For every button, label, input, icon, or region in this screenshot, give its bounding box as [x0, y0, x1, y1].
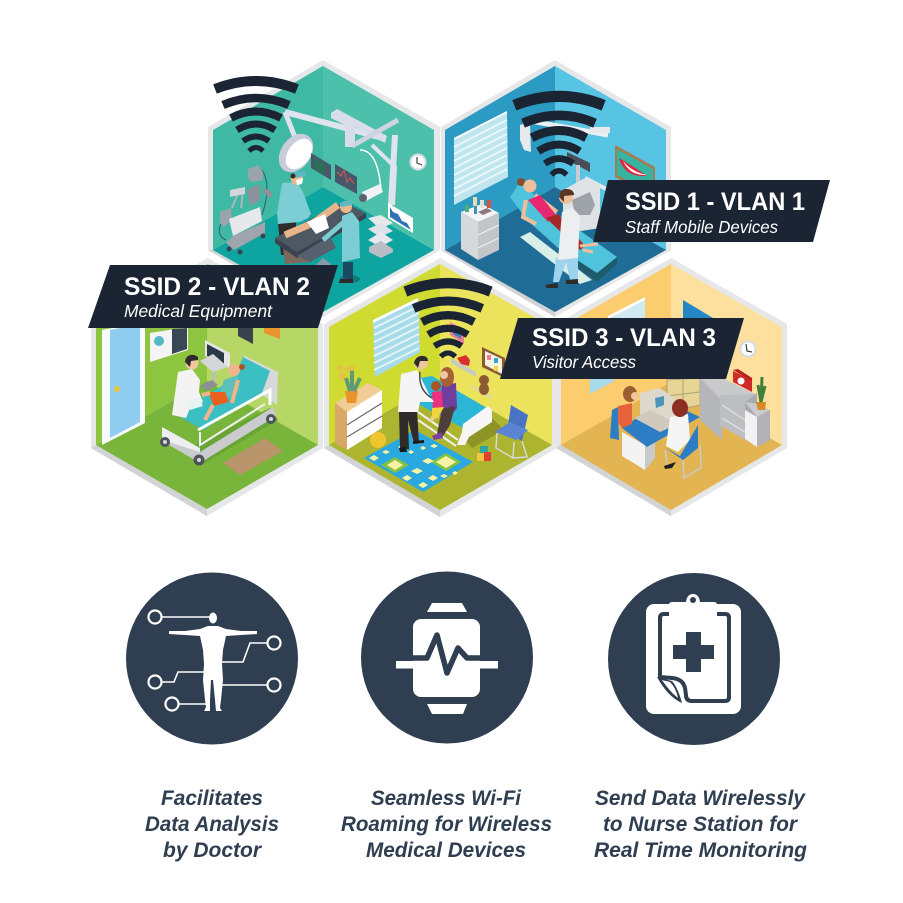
callout: SSID 1 banner: SSID 1 - VLAN 1 [625, 188, 805, 216]
text: send data wirelessly: Send Data Wirelessly [595, 787, 806, 810]
callout: SSID 3 banner: SSID 3 - VLAN 3 [532, 324, 716, 352]
window blinds [454, 111, 508, 205]
dental chair [510, 182, 617, 284]
text: seamless wi-fi roaming: Medical Devices [366, 839, 526, 862]
text: send data wirelessly: Real Time Monitoring [594, 839, 807, 862]
ward doctor [172, 355, 203, 418]
icon: wifi signal [405, 283, 491, 357]
text: facilitates data analysis: Data Analysis [145, 813, 279, 836]
text: seamless wi-fi roaming [341, 787, 552, 862]
text: facilitates data analysis [145, 787, 279, 862]
icon: wifi signal [514, 96, 604, 175]
wall decor, toys and pinboard [450, 322, 505, 399]
callout: SSID 1 banner [593, 180, 830, 242]
surgeon two [323, 200, 360, 283]
stacked trays [368, 215, 393, 258]
blue chair [495, 405, 528, 458]
ceiling boom arm [285, 109, 398, 205]
surgical lamp [272, 127, 320, 179]
seated patient [610, 386, 639, 440]
text: facilitates data analysis: by Doctor [163, 839, 263, 862]
door [102, 322, 145, 445]
dental light and arm [520, 120, 610, 190]
callout: SSID 3 banner: Visitor Access [532, 352, 636, 372]
panel: optometry room hexagon [556, 258, 787, 516]
panel: operating room hexagon [208, 60, 440, 317]
bedside monitor [200, 340, 230, 391]
ward patient [202, 364, 245, 420]
surgeon one [277, 171, 311, 255]
anesthesia machine [219, 165, 272, 254]
callout: SSID 3 banner [500, 318, 744, 379]
toy blocks [477, 446, 491, 461]
callout: SSID 2 banner: SSID 2 - VLAN 2 [124, 273, 310, 301]
text: send data wirelessly: to Nurse Station for [603, 813, 799, 836]
smile poster [615, 145, 655, 197]
icon: smartwatch with pulse [361, 572, 533, 744]
dental patient [517, 178, 598, 252]
wall clock [410, 154, 426, 170]
yellow ball [370, 432, 386, 448]
small cabinet with plant [745, 377, 770, 447]
icon: human body with data connections [126, 572, 298, 744]
window blinds [373, 298, 420, 377]
panel: dental room hexagon [441, 60, 671, 317]
eye exam machine [634, 388, 678, 432]
mother [432, 367, 457, 440]
wall picture and box [238, 328, 280, 344]
first aid case [733, 369, 752, 392]
wall clock [740, 340, 756, 358]
patient monitors [311, 153, 357, 194]
wall poster with x-ray [150, 327, 188, 362]
text: seamless wi-fi roaming: Seamless Wi-Fi [371, 787, 522, 810]
child [431, 381, 444, 421]
panel: patient ward hexagon [91, 258, 323, 516]
text: send data wirelessly [594, 787, 807, 862]
dresser with flower [335, 365, 382, 450]
eye exam desk [622, 400, 700, 470]
glass shelf [667, 378, 700, 412]
text: seamless wi-fi roaming: Roaming for Wireless [341, 813, 552, 836]
hospital bed [160, 355, 278, 466]
optometrist in chair [664, 399, 701, 478]
patterned rug [364, 430, 473, 492]
panel: pediatric room hexagon [324, 258, 557, 517]
operating table with patient [275, 202, 366, 272]
medicine cabinet [461, 197, 499, 260]
text: facilitates data analysis: Facilitates [161, 787, 263, 810]
wall chart screen [388, 203, 413, 233]
pediatric doctor [398, 356, 434, 452]
window blinds [590, 297, 645, 394]
floor mat [223, 438, 283, 475]
dental unit [563, 178, 600, 232]
dentist [545, 189, 580, 288]
callout: SSID 2 banner: Medical Equipment [124, 301, 273, 321]
exam bed [418, 376, 504, 448]
icon: wifi signal [215, 81, 297, 151]
callout: SSID 1 banner: Staff Mobile Devices [625, 217, 778, 237]
blue wall poster [683, 300, 713, 320]
icon: medical clipboard [608, 573, 780, 745]
filing cabinets [700, 377, 757, 441]
callout: SSID 2 banner [88, 265, 338, 328]
